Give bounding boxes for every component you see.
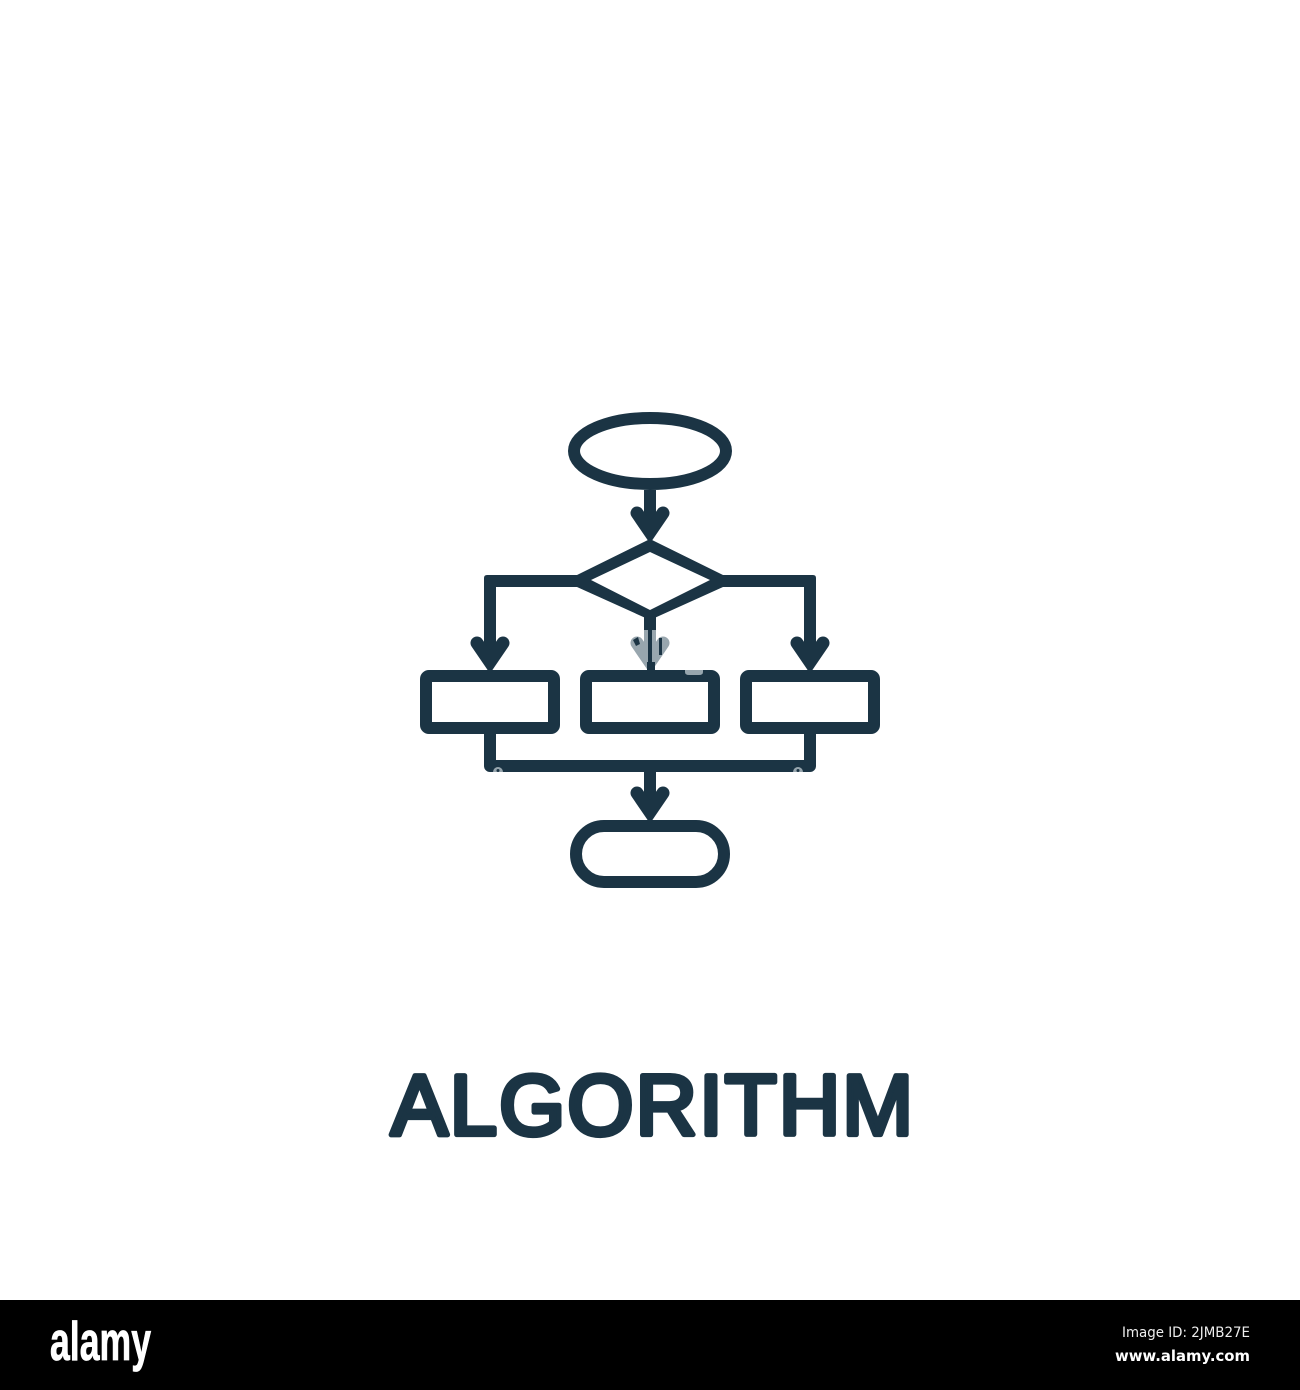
end pill node [576,826,724,882]
footer bar [0,1300,1300,1390]
right process box [746,676,874,728]
website: www.alamy.com [1115,1347,1250,1365]
centre branch arrow with watermark overlay [633,616,663,671]
logo wordmark: alamy [50,1310,151,1372]
title: ALGORITHM [391,1058,915,1154]
right branch arrow [720,575,823,662]
arrow: merge to end [637,772,663,812]
left branch arrow [477,575,580,662]
centre process box [586,676,714,728]
arrow: start to decision [637,490,663,532]
decision diamond [577,539,723,620]
start ellipse node [574,418,726,484]
watermark specks on icon [493,670,803,772]
merge connector [490,734,810,766]
image id: Image ID: 2JMB27E [1122,1325,1250,1341]
left process box [426,676,554,728]
flowchart icon [426,418,874,882]
